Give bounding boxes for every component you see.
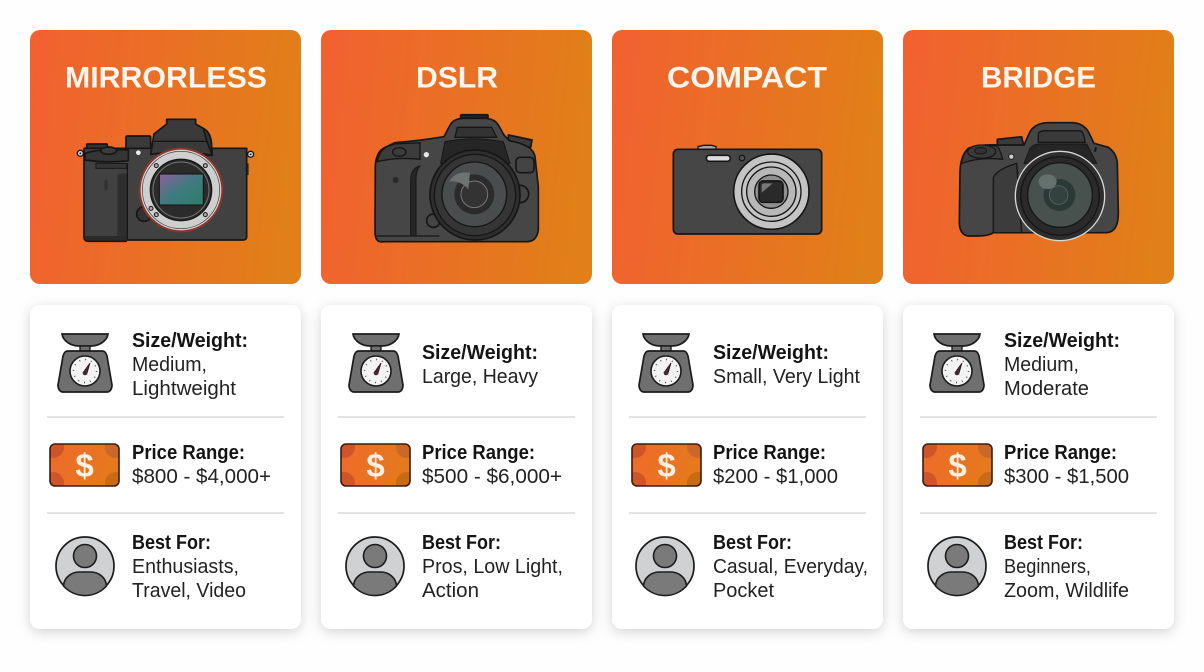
text: best for: Travel, Video	[132, 580, 246, 602]
icon: price bill	[333, 436, 418, 494]
icon: person	[346, 537, 404, 596]
text: best for: Beginners,	[1004, 556, 1091, 578]
text: size and weight	[132, 330, 248, 400]
icon: scale	[349, 334, 403, 392]
text: size and weight: Size/Weight:	[1004, 330, 1120, 352]
icon: price bill: $	[948, 447, 967, 484]
text: best for	[1004, 532, 1129, 602]
text: size and weight: Large, Heavy	[422, 366, 538, 388]
text: best for: Pros, Low Light,	[422, 556, 563, 578]
text: best for: Best For:	[713, 532, 792, 554]
text: size and weight: Medium,	[132, 354, 207, 376]
panel: dslr details	[321, 305, 592, 629]
text: price range: $500 - $6,000+	[422, 466, 562, 488]
icon: price bill: $	[366, 447, 385, 484]
panel: bridge details	[903, 305, 1174, 629]
text: best for: Best For:	[422, 532, 501, 554]
text: best for: Best For:	[1004, 532, 1083, 554]
text: size and weight: Small, Very Light	[713, 366, 860, 388]
text: size and weight: Size/Weight:	[422, 342, 538, 364]
icon: price bill	[624, 436, 709, 494]
panel: mirrorless details	[30, 305, 301, 629]
text: price range: Price Range:	[132, 442, 245, 464]
panel: dslr header	[321, 30, 592, 284]
text: size and weight: Moderate	[1004, 378, 1089, 400]
text: best for: Best For:	[132, 532, 211, 554]
text: best for: Pocket	[713, 580, 774, 602]
icon: price bill: $	[657, 447, 676, 484]
panel: compact header	[612, 30, 883, 284]
text: best for	[132, 532, 246, 602]
text: price range: $800 - $4,000+	[132, 466, 271, 488]
text: size and weight: Size/Weight:	[132, 330, 248, 352]
text: price range	[132, 442, 271, 488]
icon: scale	[930, 334, 984, 392]
icon: scale	[639, 334, 693, 392]
text: size and weight	[713, 342, 860, 388]
icon: compact camera	[673, 145, 822, 234]
icon: price bill	[42, 436, 127, 494]
text: price range: $300 - $1,500	[1004, 466, 1129, 488]
text: price range: Price Range:	[713, 442, 826, 464]
panel: bridge header	[903, 30, 1174, 284]
icon: person	[56, 537, 114, 596]
icon: scale	[58, 334, 112, 392]
text: best for: Enthusiasts,	[132, 556, 239, 578]
text: price range	[1004, 442, 1129, 488]
icon: mirrorless camera	[77, 119, 254, 241]
text: price range: $200 - $1,000	[713, 466, 838, 488]
text: size and weight: Size/Weight:	[713, 342, 829, 364]
text: size and weight	[1004, 330, 1120, 400]
text: price range: Price Range:	[422, 442, 535, 464]
text: price range	[422, 442, 562, 488]
icon: price bill	[915, 436, 1000, 494]
text: best for	[422, 532, 563, 602]
text: best for: Zoom, Wildlife	[1004, 580, 1129, 602]
heading: mirrorless: MIRRORLESS	[65, 62, 267, 94]
panel: mirrorless header	[30, 30, 301, 284]
text: size and weight	[422, 342, 538, 388]
panel: compact details	[612, 305, 883, 629]
heading: dslr: DSLR	[416, 62, 498, 94]
text: best for	[713, 532, 868, 602]
text: price range	[713, 442, 838, 488]
icon: person	[928, 537, 986, 596]
text: size and weight: Medium,	[1004, 354, 1079, 376]
text: best for: Casual, Everyday,	[713, 556, 868, 578]
icon: price bill: $	[75, 447, 94, 484]
text: size and weight: Lightweight	[132, 378, 236, 400]
heading: bridge: BRIDGE	[981, 62, 1096, 94]
heading: compact: COMPACT	[667, 62, 827, 94]
icon: bridge camera	[959, 123, 1118, 241]
text: best for: Action	[422, 580, 479, 602]
icon: person	[636, 537, 694, 596]
text: price range: Price Range:	[1004, 442, 1117, 464]
icon: dslr camera	[375, 115, 538, 242]
